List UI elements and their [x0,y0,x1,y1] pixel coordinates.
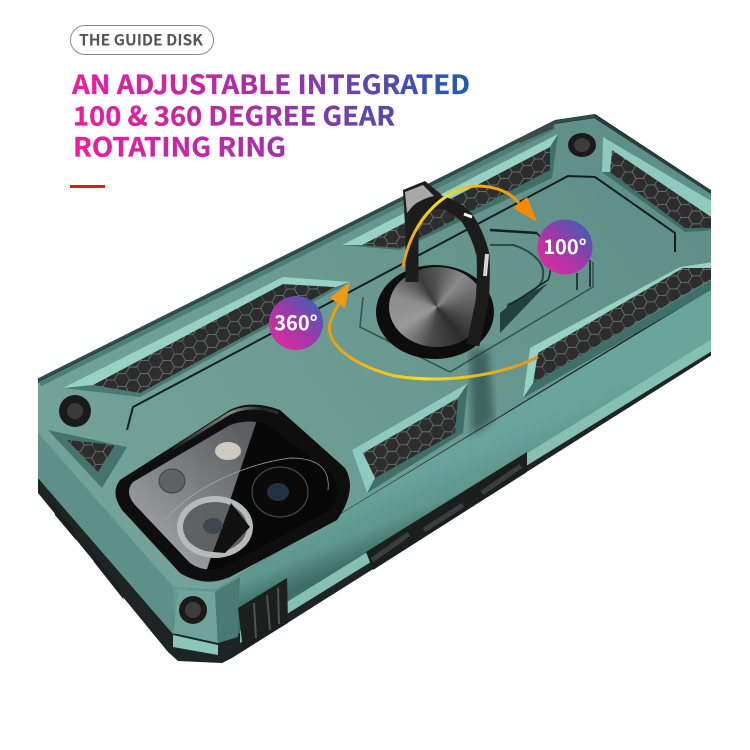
badge: 100 degrees: 100° [543,231,587,260]
top edge [38,116,595,380]
grip panel: top [342,134,558,250]
tag: the guide disk: THE GUIDE DISK [79,28,203,50]
kickstand plate [403,181,442,225]
corner facet [173,590,218,643]
side wall [38,284,720,634]
button band [52,452,527,600]
shadow below ring [470,350,494,436]
arrow: upper 100 degree arc [403,186,537,267]
grip panel: lower middle [352,383,468,493]
grip panel: top right [602,137,720,232]
badge: 360 degrees: 360° [274,307,318,336]
disk base [376,265,494,359]
camera module [115,405,350,582]
grip panel: right [523,261,720,398]
tag: the guide disk [70,26,214,54]
ring highlight [485,254,487,276]
ring arch [412,202,483,345]
title [71,63,470,164]
screws [59,133,596,624]
flash [215,442,241,460]
ring holder [376,181,494,359]
arrow: lower 360 degree arc [329,282,538,379]
title: AN ADJUSTABLE INTEGRATED [71,63,470,102]
ring recess [360,230,593,372]
corner clip [238,578,288,642]
disk face [389,267,485,347]
title: ROTATING RING [73,126,286,164]
black groove lines [127,176,675,430]
light side strip [240,334,720,643]
camera arc line [165,458,328,520]
glass highlight [128,422,256,570]
side button details [372,466,521,560]
top teal rim [40,127,555,384]
grip panel: upper left [63,277,350,397]
top face [38,118,720,590]
lens: small [159,469,185,493]
lens: main [177,496,253,558]
lens: right [252,467,308,517]
case silhouette [38,114,720,663]
red accent line [70,185,105,188]
left side wall [38,433,173,634]
title: 100 & 360 DEGREE GEAR [73,94,395,134]
grip panel: left triangle [48,430,127,488]
top volume keys [517,124,554,143]
phone case [38,114,720,663]
badge: 100 degrees [538,220,592,274]
badge: 360 degrees [269,296,323,350]
